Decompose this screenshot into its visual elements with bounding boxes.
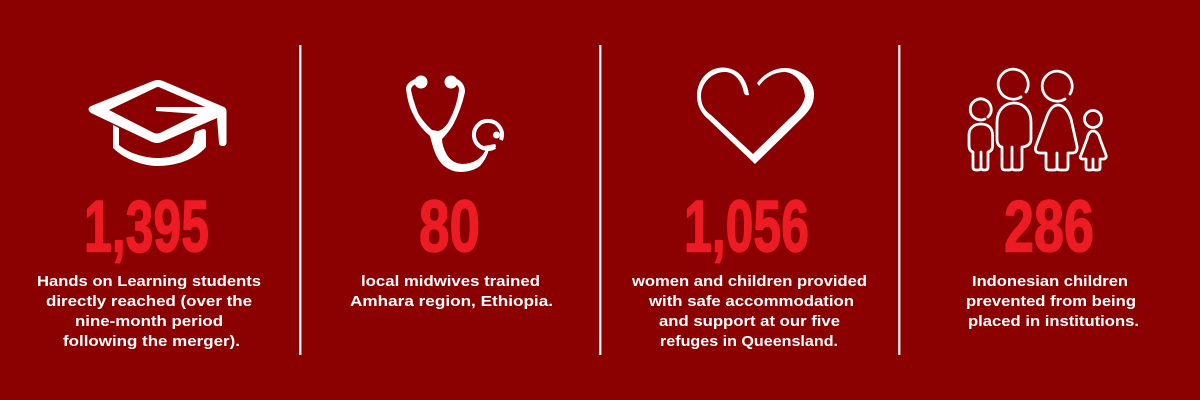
panel: midwives <box>350 76 553 310</box>
number: 1,056: 1,056 <box>684 186 809 268</box>
number: 80: 80 <box>419 186 480 268</box>
text: students description: following the merger). <box>63 333 240 350</box>
text: children description: Indonesian children <box>972 273 1128 290</box>
text: children description <box>966 273 1139 330</box>
icon: graduation cap <box>88 80 226 166</box>
text: students description: directly reached (over the <box>46 293 252 310</box>
text: students description: Hands on Learning students <box>37 273 261 290</box>
text: midwives description <box>350 273 553 310</box>
text: students description <box>37 273 261 350</box>
number: 1,395: 1,395 <box>84 186 209 268</box>
text: children description: prevented from being <box>966 293 1136 310</box>
text: refuges description: refuges in Queensland. <box>660 333 838 350</box>
text: refuges description <box>631 273 867 350</box>
number: 286: 286 <box>1004 186 1094 268</box>
panel: children <box>966 69 1139 330</box>
text: refuges description: women and children provided <box>631 273 867 290</box>
text: students description: nine-month period <box>75 313 223 330</box>
text: refuges description: and support at our five <box>659 313 840 330</box>
panel: students <box>37 80 261 350</box>
icon: stethoscope <box>406 76 502 172</box>
panel: refuges <box>631 68 867 350</box>
text: midwives description: local midwives trained <box>361 273 540 290</box>
icon: family <box>969 69 1106 170</box>
text: refuges description: with safe accommodation <box>648 293 854 310</box>
text: midwives description: Amhara region, Ethiopia. <box>350 293 553 310</box>
text: children description: placed in institutions. <box>968 313 1139 330</box>
icon: heart <box>697 68 814 164</box>
